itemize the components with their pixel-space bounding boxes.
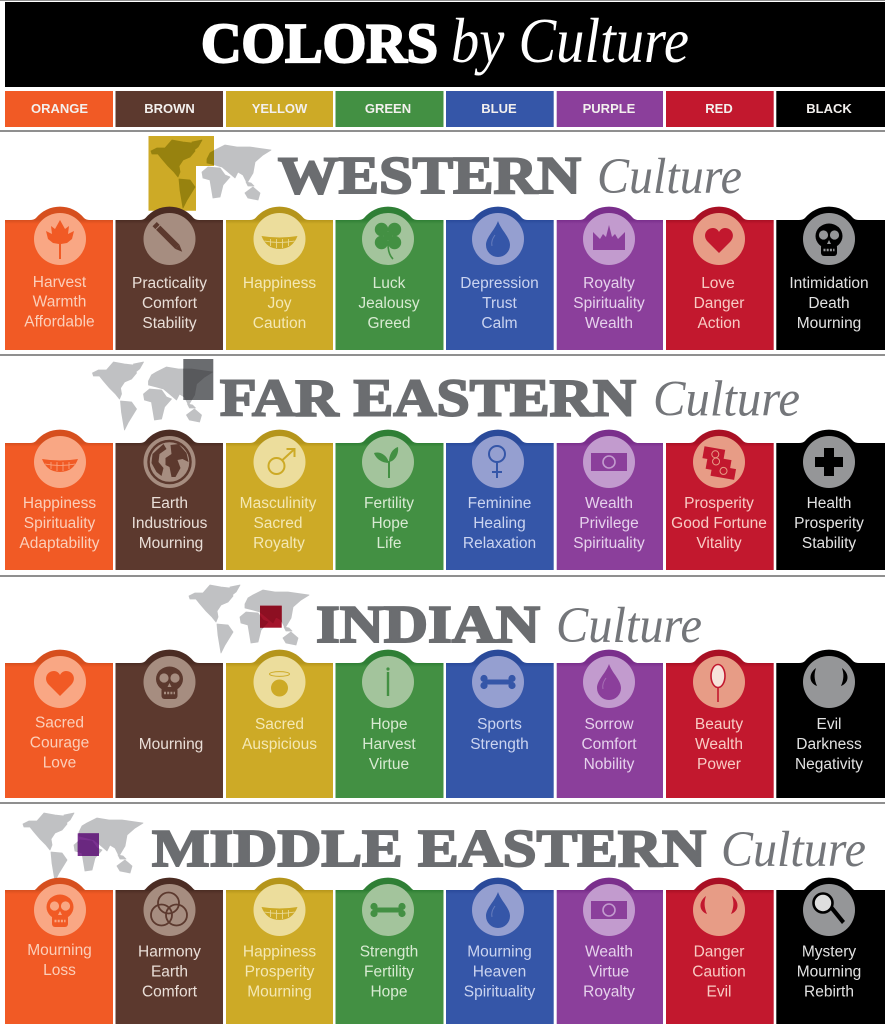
text: brown meanings: Mourning [139,736,203,753]
icon: crown [579,207,639,265]
heading: Western Culture: WESTERN [278,147,581,205]
icon: skull [140,650,200,708]
card: blue [446,430,554,570]
icon: candle mark [358,650,418,708]
icon: bone [468,650,528,708]
icon: interlocking rings [140,878,200,936]
heading: Indian Culture [316,596,702,654]
legend: orange: ORANGE [31,101,88,116]
text: green meanings: Virtue [369,756,409,773]
panel: Middle Eastern culture [5,813,885,1024]
icon: banknote [579,430,639,488]
text: green meanings: Hope [370,716,408,733]
text: blue meanings: Feminine [468,495,531,512]
card: orange [5,650,113,798]
text: purple meanings: Spirituality [573,295,645,312]
text: brown meanings: Comfort [142,984,198,1001]
text: orange meanings: Affordable [24,314,95,331]
legend: orange [5,91,113,127]
text: blue meanings: Heaven [473,964,526,981]
text: red meanings: Danger [694,944,744,961]
card: brown [116,650,223,798]
text: red meanings: Good Fortune [671,515,767,532]
text: orange meanings: Happiness [23,495,96,512]
card: yellow [226,430,333,570]
heading: Indian Culture: INDIAN [316,596,540,654]
icon: maple leaf [30,207,90,265]
panel: Indian culture [5,585,885,798]
map: India highlighted [189,585,309,653]
text: purple meanings: Royalty [583,275,635,292]
text: blue meanings: Depression [460,275,539,292]
text: green meanings: Hope [370,984,408,1001]
legend: black [776,91,885,127]
legend: red [666,91,774,127]
text: blue meanings: Relaxation [463,535,536,552]
card: blue [446,878,554,1024]
text: blue meanings: Mourning [467,944,532,961]
text: yellow meanings: Mourning [247,984,312,1001]
icon: heart [689,207,749,265]
icon: male symbol [250,430,310,488]
text: red meanings: Action [697,315,741,332]
text: red meanings: Prosperity [684,495,754,512]
text: red meanings: Beauty [695,716,743,733]
card: green [336,207,444,350]
card: orange [5,430,113,570]
text: black meanings: Darkness [796,736,862,753]
text: red meanings: Power [697,756,741,773]
icon: magnifying glass [799,878,859,936]
text: black meanings: Prosperity [794,515,864,532]
legend: green: GREEN [365,101,411,116]
text: yellow meanings: Prosperity [245,964,315,981]
text: purple meanings: Virtue [589,964,629,981]
card: brown [116,207,223,350]
text: green meanings: Fertility [364,495,414,512]
text: green meanings: Life [376,535,402,552]
text: green meanings: Harvest [362,736,416,753]
text: black meanings: Negativity [795,756,863,773]
icon: smile [30,430,90,488]
card: green [336,430,444,570]
card: red [666,430,774,570]
text: brown meanings: Comfort [142,295,198,312]
text: blue meanings: Spirituality [464,984,535,1001]
card: yellow [226,650,333,798]
text: black meanings: Health [807,495,851,512]
icon: sprout [358,430,418,488]
text: green meanings: Greed [367,315,411,332]
text: blue meanings: Strength [470,736,529,753]
text: black meanings: Mystery [802,944,856,961]
icon: horns [689,878,749,936]
card: red [666,650,774,798]
text: orange meanings: Sacred [35,715,84,732]
panel: Western culture [5,136,885,350]
icon: banknote [579,878,639,936]
text: green meanings: Fertility [364,964,414,981]
text: orange meanings: Love [43,755,76,772]
title: COLORS: COLORS [201,13,438,75]
text: purple meanings: Wealth [585,944,633,961]
icon: smile [250,878,310,936]
card: purple [557,650,663,798]
text: purple meanings: Royalty [583,984,635,1001]
text: black meanings: Death [808,295,850,312]
icon: tear drop [579,650,639,708]
text: purple meanings: Comfort [581,736,637,753]
legend: yellow [226,91,333,127]
text: orange meanings: Mourning [27,942,92,959]
card: orange [5,878,113,1024]
text: blue meanings: Sports [477,716,522,733]
heading: Western Culture: Culture [597,149,742,205]
icon: mirror [689,650,749,708]
card: purple [557,430,663,570]
card: blue [446,207,554,350]
map: Middle East highlighted [23,813,143,881]
heading: Far Eastern Culture [220,370,800,428]
heading: Middle Eastern Culture: Culture [721,822,866,878]
text: orange meanings: Adaptability [19,535,100,552]
text: black meanings: Mourning [797,964,861,981]
text: yellow meanings: Royalty [253,535,305,552]
legend: green [336,91,444,127]
card: red [666,878,774,1024]
text: black meanings: Stability [802,535,856,552]
legend: brown [116,91,223,127]
text: orange meanings: Courage [30,735,89,752]
icon: skull [30,878,90,936]
icon: female symbol [468,430,528,488]
text: yellow meanings: Happiness [243,944,316,961]
text: red meanings: Caution [692,964,746,981]
title: by Culture: by Culture [451,5,689,76]
text: black meanings: Evil [817,716,841,733]
title banner [5,2,885,87]
legend: yellow: YELLOW [252,101,308,116]
icon: bone [358,878,418,936]
text: yellow meanings: Joy [267,295,292,312]
text: orange meanings: Spirituality [24,515,95,532]
legend: blue: BLUE [481,101,517,116]
card: purple [557,878,663,1024]
text: brown meanings: Stability [142,315,197,332]
card: green [336,878,444,1024]
text: red meanings: Danger [694,295,744,312]
text: brown meanings: Harmony [138,944,201,961]
legend: purple: PURPLE [583,101,636,116]
icon: horns [799,650,859,708]
panel: Far Eastern culture [5,359,885,570]
text: purple meanings: Wealth [585,495,633,512]
legend: blue [446,91,554,127]
heading: Middle Eastern Culture: MIDDLE EASTERN [152,820,706,878]
text: purple meanings: Nobility [584,756,635,773]
card: green [336,650,444,798]
text: brown meanings: Earth [151,495,188,512]
text: orange meanings: Loss [43,962,76,979]
icon: four-leaf clover [358,207,418,265]
card: yellow [226,878,333,1024]
text: green meanings: Hope [371,515,409,532]
text: yellow meanings: Sacred [253,515,303,532]
icon: skull [799,207,859,265]
legend: red: RED [705,101,733,116]
heading: Indian Culture: Culture [556,598,702,654]
map: East Asia highlighted [92,359,213,430]
heading: Far Eastern Culture: FAR EASTERN [220,370,636,428]
card: black [776,878,885,1024]
map: Americas highlighted [148,136,271,211]
icon: tear drop [468,207,528,265]
text: yellow meanings: Happiness [243,275,316,292]
card: orange [5,207,113,350]
text: yellow meanings: Masculinity [240,495,317,512]
text: black meanings: Mourning [797,315,861,332]
icon: smile [250,207,310,265]
text: orange meanings: Warmth [33,294,86,311]
icon: medical cross [799,430,859,488]
legend: purple [557,91,663,127]
heading: Middle Eastern Culture [152,820,866,878]
text: green meanings: Strength [360,944,418,961]
colour legend bar [5,91,885,127]
text: brown meanings: Mourning [139,535,203,552]
card: black [776,430,885,570]
card: yellow [226,207,333,350]
text: purple meanings: Privilege [579,515,639,532]
text: yellow meanings: Sacred [255,716,304,733]
text: green meanings: Luck [373,275,406,292]
text: red meanings: Wealth [695,736,743,753]
heading: Far Eastern Culture: Culture [653,372,800,428]
icon: globe [140,430,200,488]
icon: heart [30,650,90,708]
card: blue [446,650,554,798]
card: purple [557,207,663,350]
card: brown [116,430,223,570]
text: brown meanings: Earth [151,964,188,981]
card: black [776,650,885,798]
text: red meanings: Vitality [696,535,742,552]
icon: halo [250,650,310,708]
legend: brown: BROWN [144,101,195,116]
text: black meanings: Intimidation [789,275,869,292]
icon: pencil [140,207,200,265]
text: black meanings: Rebirth [804,984,854,1001]
text: purple meanings: Sorrow [584,716,634,733]
icon: stack of banknotes [689,430,749,488]
text: blue meanings: Healing [473,515,526,532]
text: orange meanings: Harvest [33,274,87,291]
card: red [666,207,774,350]
text: purple meanings: Spirituality [573,535,645,552]
heading: Western Culture [278,147,742,205]
text: red meanings: Evil [707,984,731,1001]
text: blue meanings: Trust [482,295,518,312]
text: red meanings: Love [701,275,735,292]
icon: tear drop [468,878,528,936]
card: black [776,207,885,350]
card: brown [116,878,223,1024]
text: yellow meanings: Auspicious [242,736,317,753]
text: brown meanings: Industrious [132,515,208,532]
text: brown meanings: Practicality [132,275,207,292]
text: yellow meanings: Caution [253,315,306,332]
legend: black: BLACK [806,101,852,116]
text: purple meanings: Wealth [585,315,633,332]
text: green meanings: Jealousy [358,295,420,312]
text: blue meanings: Calm [481,315,518,332]
